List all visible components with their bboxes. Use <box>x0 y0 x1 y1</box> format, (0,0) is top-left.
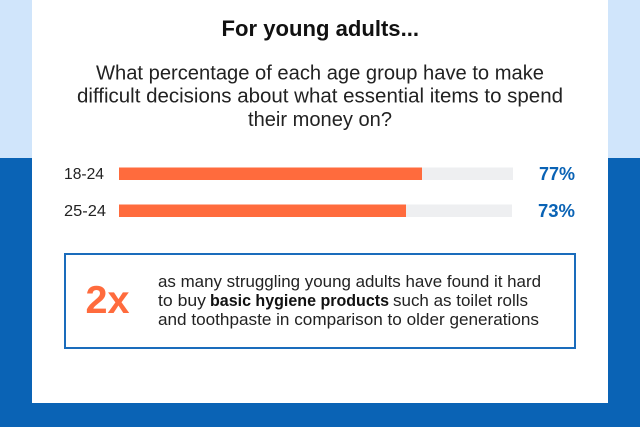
value: 73%: 73% <box>538 200 575 221</box>
bar row: 18-24 <box>64 163 575 184</box>
callout figure: 2x: 2x <box>86 279 130 322</box>
bar fill: 25-24 <box>119 204 406 217</box>
callout text block: and toothpaste in comparison to older generations <box>158 311 539 329</box>
question text block: their money on? <box>248 108 392 131</box>
background: dark blue band <box>0 158 640 427</box>
bar row: 25-24 <box>64 200 575 221</box>
bar chart: spending decisions by age group <box>64 163 575 221</box>
value: 77%: 77% <box>539 163 575 184</box>
callout border <box>65 254 575 348</box>
bar track: 18-24 <box>119 168 513 180</box>
callout text block <box>158 273 541 329</box>
question text block <box>77 62 563 131</box>
callout text block: basic hygiene products <box>210 292 389 310</box>
title: For young adults... <box>222 16 419 41</box>
label: 25-24: 25-24 <box>64 203 106 220</box>
bar fill: 18-24 <box>119 168 422 180</box>
bar track: 25-24 <box>119 204 512 217</box>
label: 18-24: 18-24 <box>64 166 104 183</box>
callout text block: such as toilet rolls <box>393 292 528 310</box>
callout: 2x hygiene products <box>65 254 575 348</box>
question text block: difficult decisions about what essential items to spend <box>77 84 563 108</box>
callout text block: as many struggling young adults have found it hard <box>158 273 541 291</box>
callout text block: to buy <box>158 292 207 310</box>
question text block: What percentage of each age group have to make <box>96 62 544 84</box>
background: light blue band <box>0 0 640 158</box>
